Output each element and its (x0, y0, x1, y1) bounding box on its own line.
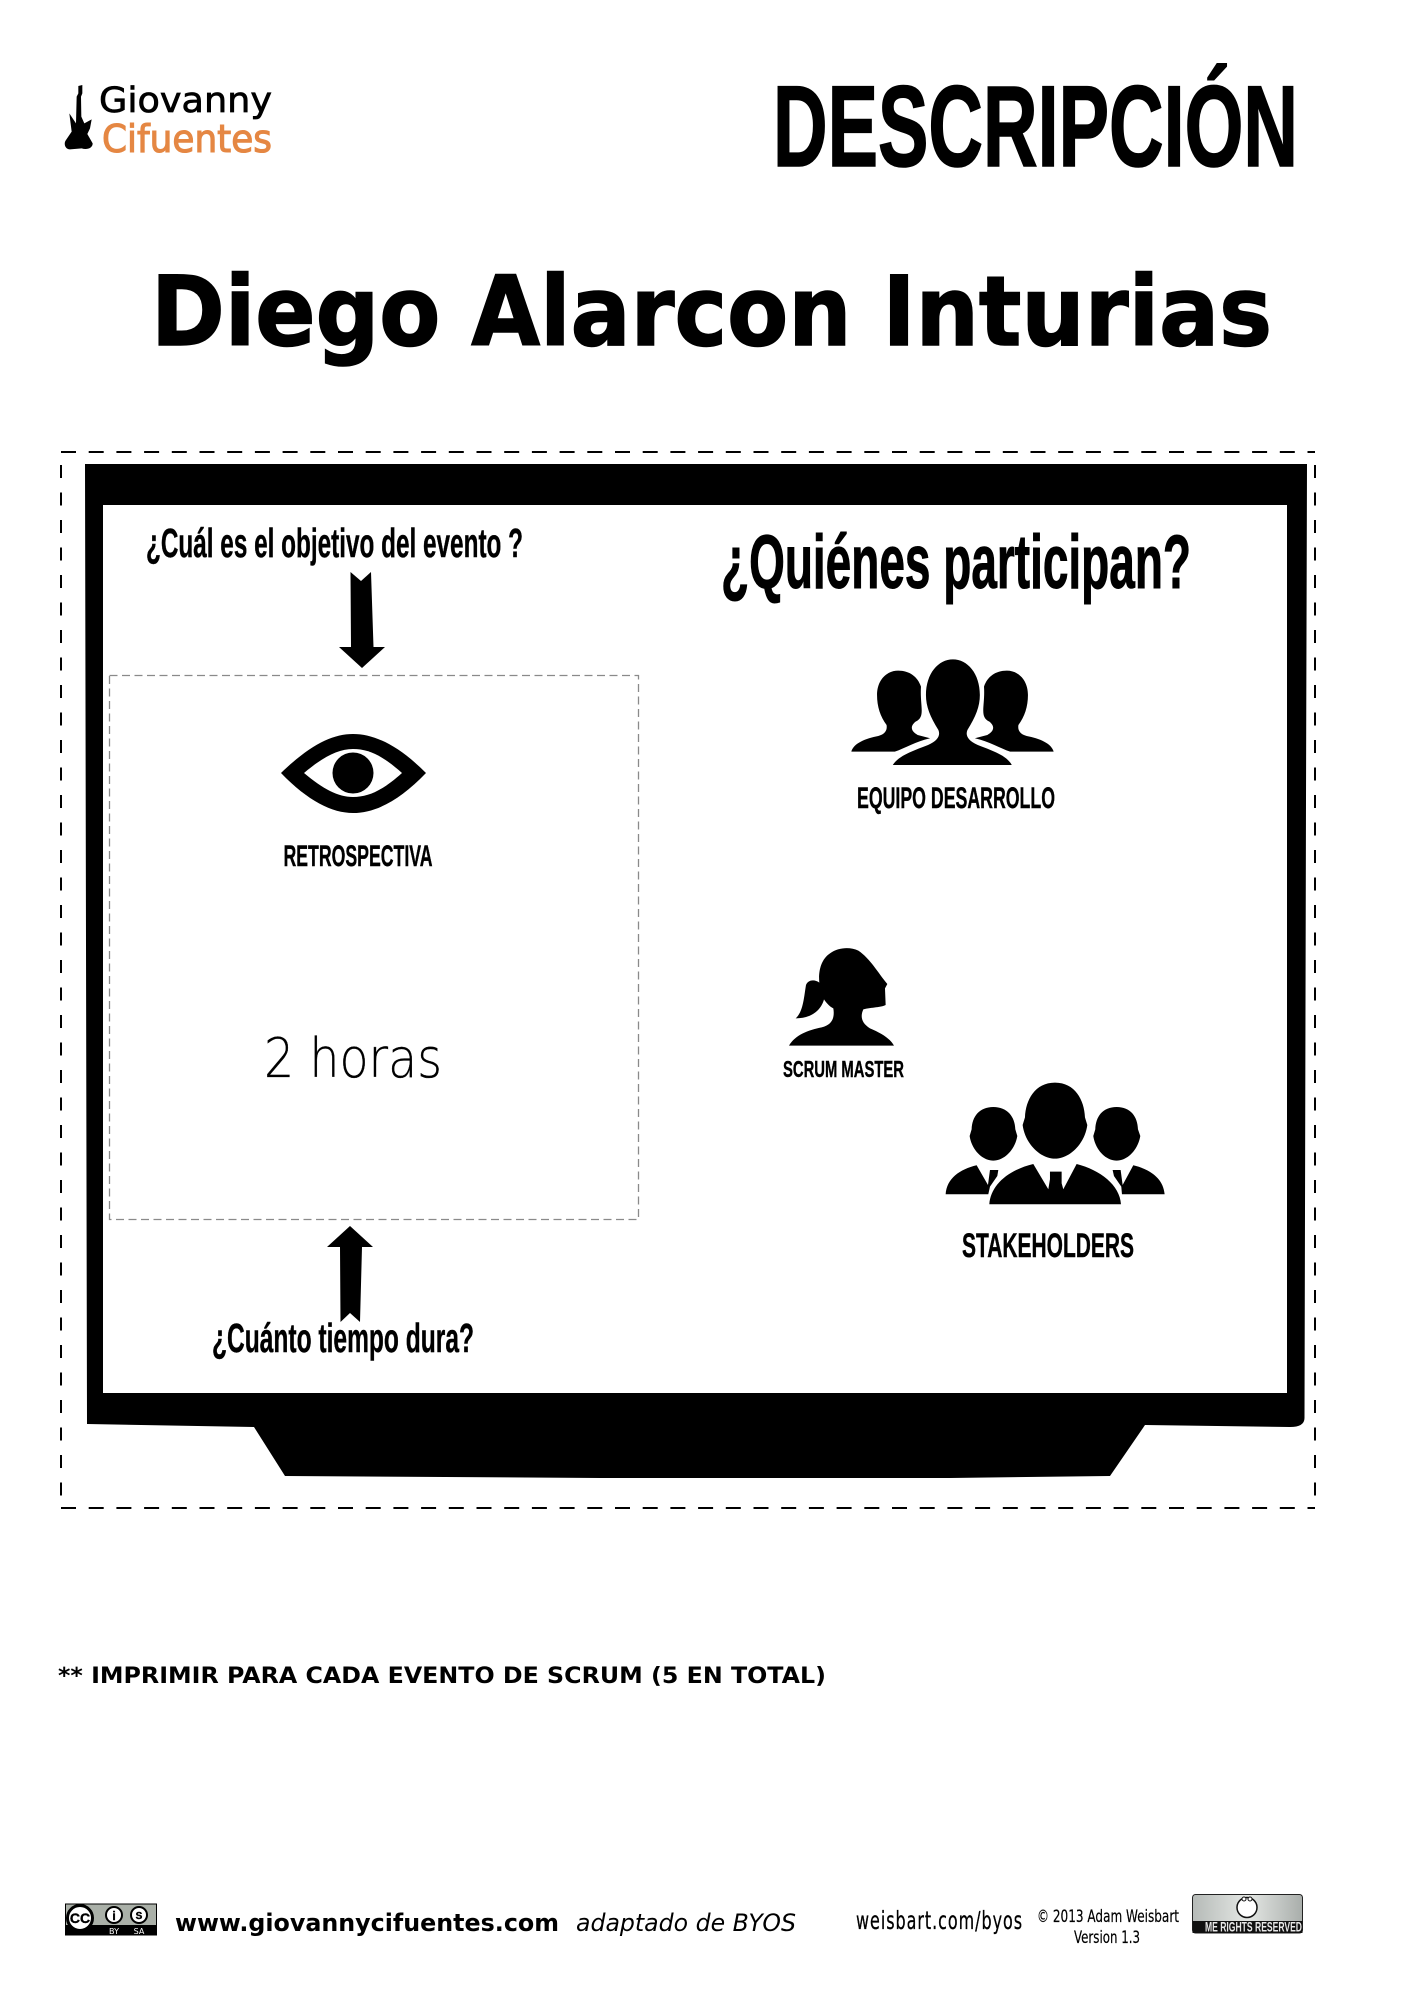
icon: CC BY SA badge: CC (70, 1910, 90, 1926)
icon: me rights reserved badge (1192, 1894, 1302, 1934)
cut line: outer dashed frame (61, 452, 1315, 1508)
arrow: down (339, 572, 385, 668)
logo: Giovanny Cifuentes (65, 81, 272, 161)
footer attribution: adaptado de BYOS (576, 1909, 796, 1937)
monitor screen (103, 505, 1287, 1393)
icon: scrum master (789, 948, 894, 1046)
icon: me rights reserved badge: ME RIGHTS RESERVED (1205, 1918, 1302, 1934)
label: STAKEHOLDERS: STAKEHOLDERS (962, 1227, 1134, 1265)
label: objective question: ¿Cuál es el objetivo del evento ? (146, 520, 523, 566)
version: Version 1.3 (1074, 1928, 1140, 1948)
panel: participants (721, 520, 1191, 1265)
icon: eye (281, 734, 426, 813)
icon: CC BY SA badge: S (136, 1911, 143, 1922)
arrow: up (327, 1226, 373, 1322)
title: name: Diego Alarcon Inturias (151, 256, 1272, 368)
copyright: © 2013 Adam Weisbart (1037, 1907, 1179, 1927)
label: duration question: ¿Cuánto tiempo dura? (212, 1315, 474, 1361)
logo: Giovanny Cifuentes: Giovanny (99, 81, 272, 121)
icon: development team (851, 659, 1054, 765)
dashed box (110, 676, 638, 1220)
monitor body (85, 464, 1307, 1478)
footer right (856, 1894, 1302, 1948)
icon: CC BY SA badge: BY (109, 1927, 119, 1936)
panel: event objective (110, 520, 638, 1361)
label: RETROSPECTIVA: RETROSPECTIVA (284, 840, 432, 873)
icon: CC BY SA badge: i (112, 1909, 116, 1923)
label: SCRUM MASTER: SCRUM MASTER (783, 1056, 904, 1082)
icon: CC BY SA badge (66, 1904, 156, 1936)
label: EQUIPO DESARROLLO: EQUIPO DESARROLLO (857, 782, 1055, 815)
duration text: 2 horas (264, 1027, 442, 1090)
footer left (66, 1904, 796, 1937)
icon: guitar (65, 85, 93, 149)
logo: Giovanny Cifuentes: Cifuentes (102, 117, 272, 161)
note: print instruction: ** IMPRIMIR PARA CADA EVENTO DE SCRUM (5 EN TOTAL) (58, 1663, 826, 1689)
footer website: www.giovannycifuentes.com (175, 1909, 559, 1937)
icon: stakeholders (946, 1083, 1165, 1204)
icon: CC BY SA badge: SA (134, 1927, 145, 1936)
footer link: weisbart.com/byos (856, 1906, 1023, 1935)
